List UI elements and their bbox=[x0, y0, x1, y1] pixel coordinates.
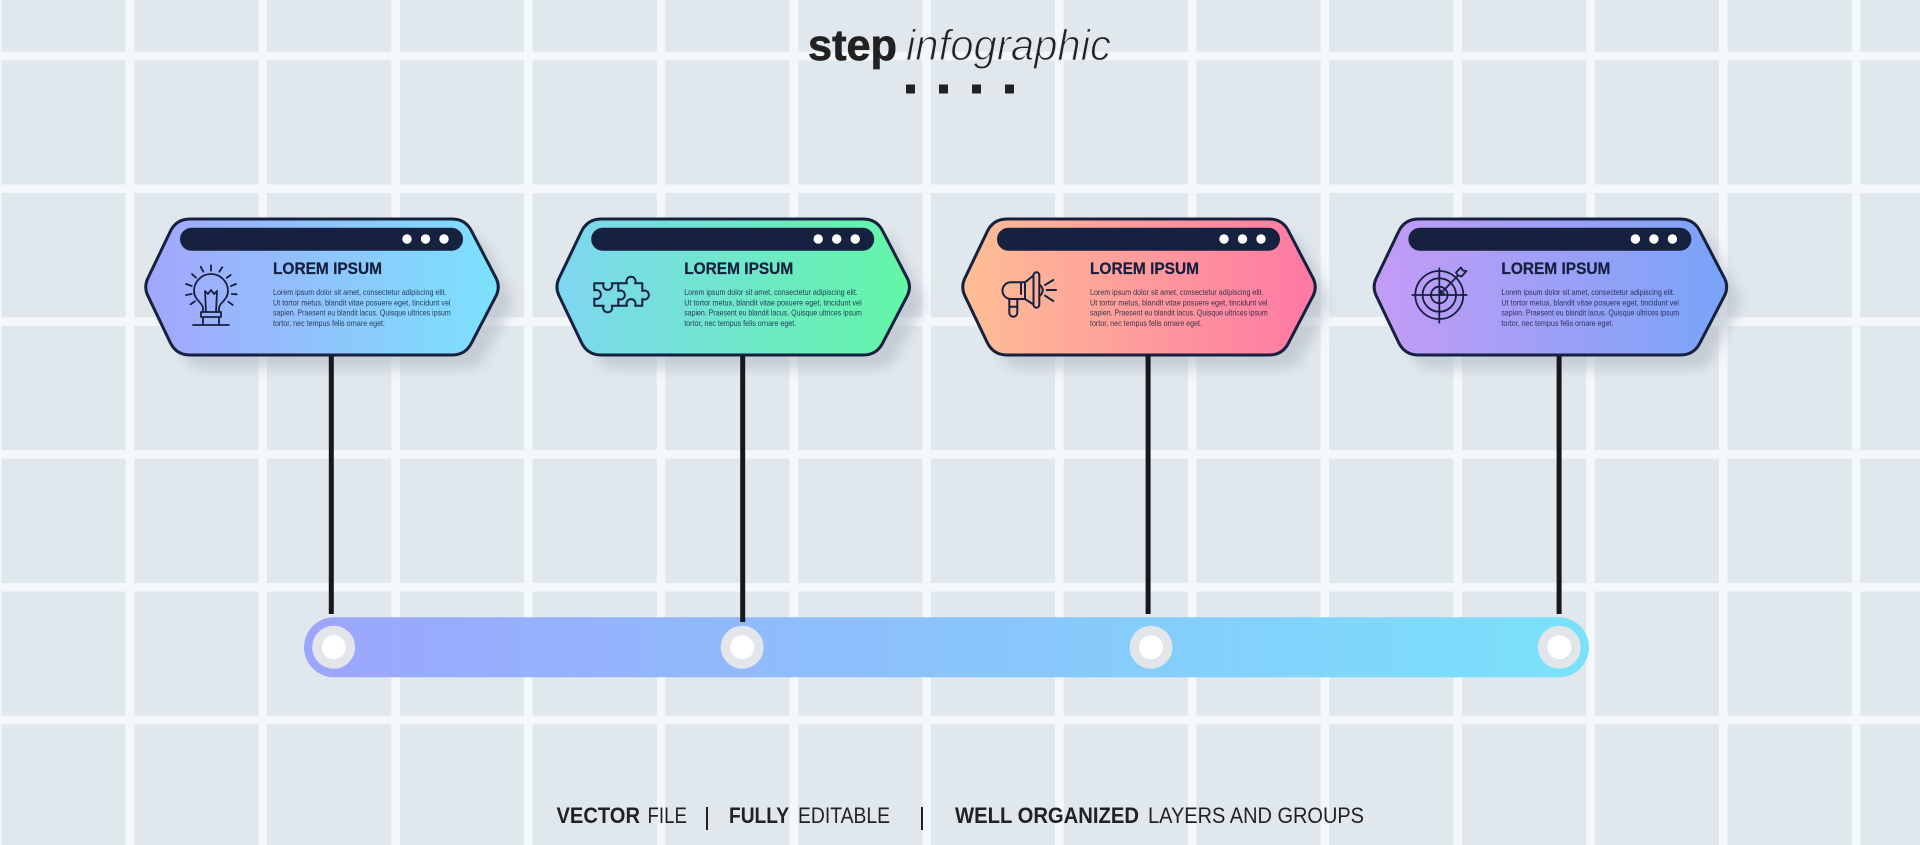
text block: sapien. Praesent eu blandit lacus. Quisque ultrices ipsum bbox=[273, 308, 451, 318]
panel: step 2 bbox=[557, 219, 923, 369]
timeline node 3 bbox=[1130, 626, 1172, 669]
text block: Lorem ipsum dolor sit amet, consectetur adipiscing elit. bbox=[273, 287, 446, 297]
title bbox=[808, 21, 1111, 70]
text block bbox=[684, 287, 862, 328]
icon: target bbox=[1412, 268, 1467, 323]
text block: sapien. Praesent eu blandit lacus. Quisque ultrices ipsum bbox=[1090, 308, 1268, 318]
text block: Ut tortor metus, blandit vitae posuere eget, tincidunt vel bbox=[684, 297, 862, 307]
timeline node 1 bbox=[312, 626, 355, 669]
panel: step 1 bbox=[146, 219, 512, 369]
heading: LOREM IPSUM bbox=[1501, 259, 1610, 278]
text block: Lorem ipsum dolor sit amet, consectetur adipiscing elit. bbox=[1501, 287, 1675, 297]
heading: LOREM IPSUM bbox=[1090, 259, 1199, 278]
icon: puzzle bbox=[594, 277, 649, 312]
text block: Ut tortor metus, blandit vitae posuere eget, tincidunt vel bbox=[1090, 297, 1268, 307]
footer text bbox=[556, 803, 1364, 830]
timeline node 2 bbox=[721, 626, 764, 669]
connector stems bbox=[329, 356, 1562, 622]
footer text: FILE bbox=[648, 803, 687, 828]
footer text: EDITABLE bbox=[798, 803, 890, 828]
title: step bbox=[808, 21, 897, 70]
footer text: VECTOR bbox=[556, 803, 640, 828]
text block: Ut tortor metus, blandit vitae posuere eget, tincidunt vel bbox=[273, 297, 451, 307]
footer text: LAYERS AND GROUPS bbox=[1148, 803, 1364, 828]
text block: Lorem ipsum dolor sit amet, consectetur adipiscing elit. bbox=[684, 287, 858, 297]
heading: LOREM IPSUM bbox=[684, 259, 793, 278]
text block: sapien. Praesent eu blandit lacus. Quisque ultrices ipsum bbox=[684, 308, 862, 318]
icon: light bulb bbox=[186, 265, 237, 325]
text block: tortor, nec tempus felis ornare eget. bbox=[273, 318, 385, 328]
title: infographic bbox=[906, 21, 1111, 70]
text block: tortor, nec tempus felis ornare eget. bbox=[684, 318, 796, 328]
footer text: FULLY bbox=[729, 803, 789, 828]
text block: tortor, nec tempus felis ornare eget. bbox=[1501, 318, 1613, 328]
text block bbox=[1090, 287, 1268, 328]
title dots bbox=[906, 84, 1014, 94]
text block: tortor, nec tempus felis ornare eget. bbox=[1090, 318, 1202, 328]
timeline node 4 bbox=[1538, 626, 1581, 669]
text block: Ut tortor metus, blandit vitae posuere eget, tincidunt vel bbox=[1501, 297, 1679, 307]
text block: Lorem ipsum dolor sit amet, consectetur adipiscing elit. bbox=[1090, 287, 1264, 297]
icon: megaphone bbox=[1003, 272, 1056, 317]
footer text: WELL ORGANIZED bbox=[955, 803, 1139, 828]
timeline bar bbox=[304, 617, 1589, 677]
panel: step 4 bbox=[1374, 219, 1741, 369]
text block bbox=[273, 287, 451, 328]
text block bbox=[1501, 287, 1679, 328]
panel: step 3 bbox=[963, 219, 1329, 369]
heading: LOREM IPSUM bbox=[273, 259, 382, 278]
text block: sapien. Praesent eu blandit lacus. Quisque ultrices ipsum bbox=[1501, 308, 1679, 318]
